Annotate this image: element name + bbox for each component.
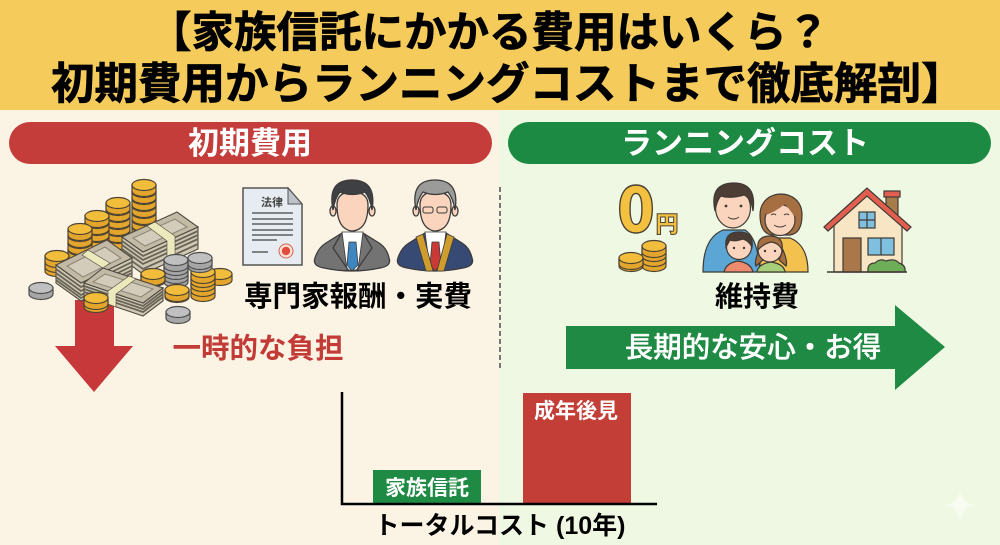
- bar: family trust: 家族信託: [385, 477, 469, 500]
- icon: professional in grey suit: [314, 180, 390, 271]
- panel header: running cost: ランニングコスト: [621, 126, 869, 161]
- label: maintenance cost: 維持費: [715, 281, 799, 312]
- arrow: long-term peace of mind: [566, 305, 945, 390]
- icon: zero yen with coins: 円: [656, 211, 678, 237]
- bundle: front: [84, 268, 163, 316]
- panel header: initial cost: 初期費用: [188, 126, 312, 161]
- panel header: running cost: [508, 122, 991, 164]
- panel header: initial cost: [9, 122, 492, 164]
- bar: adult guardianship: 成年後見: [534, 399, 618, 423]
- icon: sparkle: [945, 490, 975, 522]
- bundle: left: [56, 240, 132, 301]
- icon: family: [703, 183, 808, 272]
- label: one-time burden: 一時的な負担: [172, 333, 344, 365]
- icon: legal document: [243, 188, 302, 265]
- bar: family trust: [373, 470, 481, 503]
- title band: 【家族信託にかかる費用はいくら？: [149, 10, 829, 57]
- icon: money pile: [29, 180, 232, 324]
- left background: [0, 110, 499, 545]
- right background: [499, 110, 1000, 545]
- axis label: トータルコスト (10年): [375, 512, 625, 540]
- icon: legal document: 法律: [261, 195, 283, 209]
- icon: zero yen with coins: [617, 160, 678, 272]
- icon: zero yen with coins: 0: [617, 160, 655, 250]
- bundle: back: [122, 212, 198, 274]
- down arrow: [55, 300, 133, 392]
- icon: professional with gold sash: [397, 180, 473, 271]
- icon: house: [824, 188, 911, 272]
- title band: [0, 0, 1000, 110]
- divider: [499, 187, 501, 368]
- label: expert fees: 専門家報酬・実費: [244, 281, 472, 313]
- arrow: long-term peace of mind: 長期的な安心・お得: [625, 332, 881, 364]
- bar: adult guardianship: [523, 393, 631, 503]
- title band: 初期費用からランニングコストまで徹底解剖】: [51, 61, 964, 109]
- bar chart: total cost: [342, 392, 657, 540]
